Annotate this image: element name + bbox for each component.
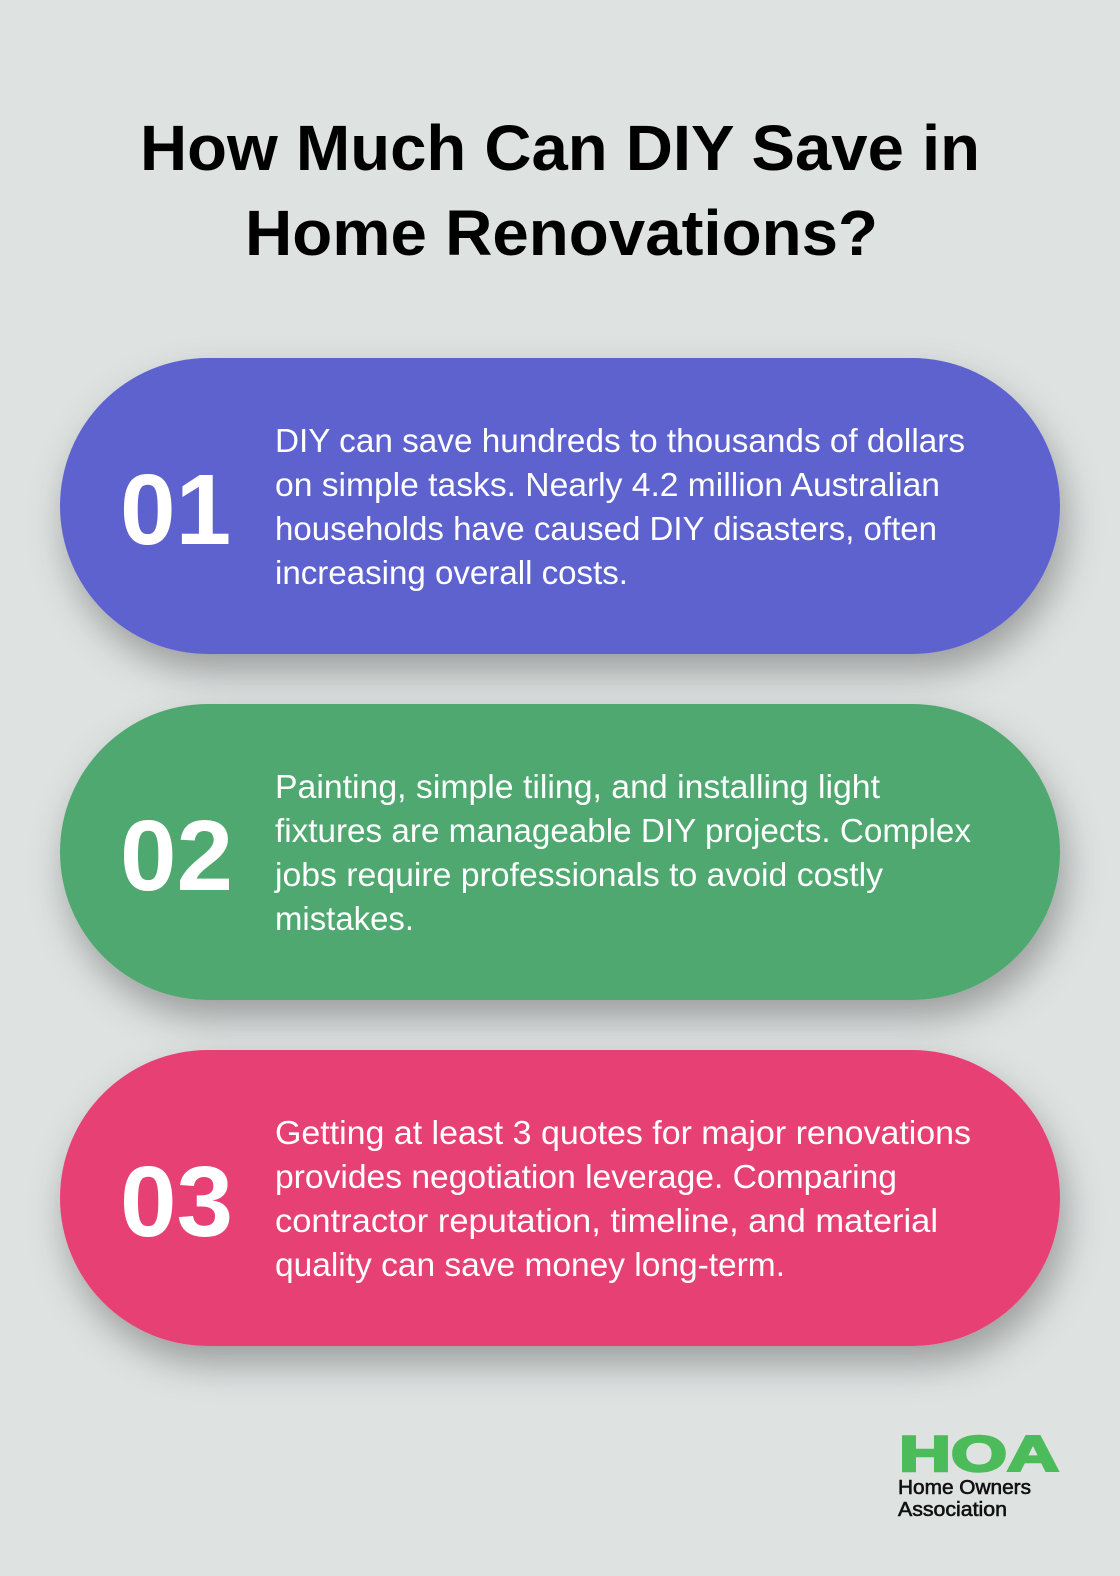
text block 01 [275,422,965,591]
pill background 03 [60,1050,1060,1346]
number 03: 03 [120,1146,233,1258]
logo name: Association [898,1499,1007,1521]
text block 02 [274,768,972,937]
panel: step 02 [60,704,1060,1000]
text block 03: quality can save money long-term. [275,1246,785,1283]
title: Home Renovations? [245,197,878,269]
logo mark HOA: HOA [899,1426,1059,1482]
text block 02: jobs require professionals to avoid costly [274,856,884,893]
pill background 02 [60,704,1060,1000]
title: How Much Can DIY Save in [140,112,980,184]
text block 01: on simple tasks. Nearly 4.2 million Australian [275,466,940,503]
text block 03: contractor reputation, timeline, and material [275,1202,938,1239]
text block 01: households have caused DIY disasters, often [275,510,937,547]
text block 02: Painting, simple tiling, and installing light [275,768,880,805]
panel: step 03 [60,1050,1060,1346]
text block 01: DIY can save hundreds to thousands of dollars [275,422,965,459]
panel: step 01 [60,358,1060,654]
text block 03: Getting at least 3 quotes for major renovations [275,1114,971,1151]
logo name [898,1477,1031,1521]
number 01: 01 [120,454,231,566]
text block 01: increasing overall costs. [275,554,628,591]
logo name: Home Owners [898,1477,1031,1499]
pill background 01 [60,358,1060,654]
text block 02: fixtures are manageable DIY projects. Complex [275,812,972,849]
text block 03 [275,1114,971,1283]
title [140,112,980,269]
logo: HOA Home Owners Association [898,1426,1059,1521]
number 02: 02 [120,800,233,912]
text block 02: mistakes. [275,900,414,937]
text block 03: provides negotiation leverage. Comparing [275,1158,897,1195]
